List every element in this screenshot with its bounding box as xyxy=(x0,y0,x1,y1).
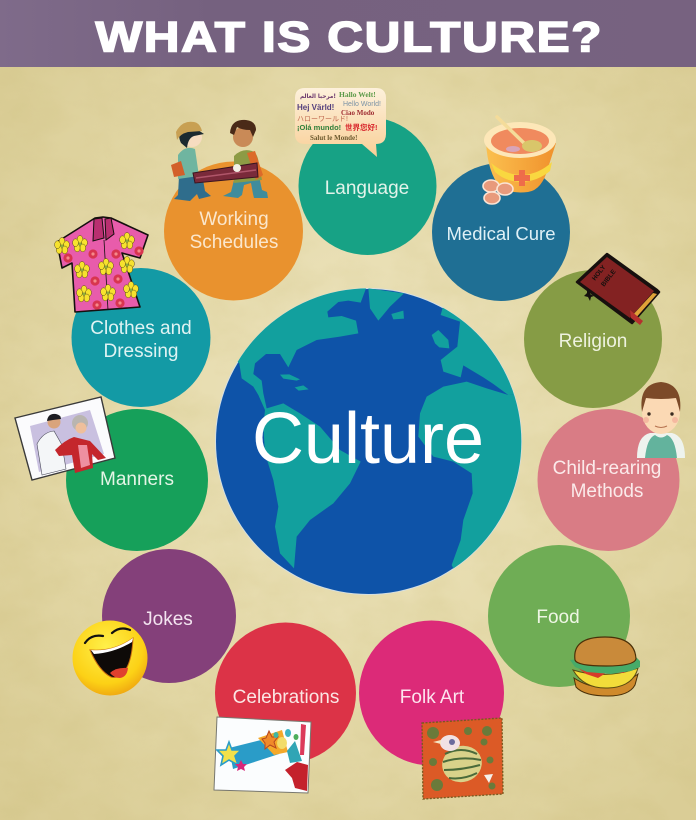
icon: child portrait xyxy=(637,382,685,458)
panel: Clothes and Dressing xyxy=(55,217,210,407)
panel: Medical Cure xyxy=(432,117,570,301)
panel: Working Schedules: Schedules xyxy=(190,232,278,253)
icon: holy bible xyxy=(577,254,659,325)
panel: Clothes and Dressing: Dressing xyxy=(104,341,178,362)
icon: speech bubble of greetings xyxy=(295,88,386,157)
panel: Language: Language xyxy=(325,178,409,199)
world map continents xyxy=(238,288,522,568)
icon: speech bubble of greetings: ハローワールド! xyxy=(297,115,348,123)
panel: Language xyxy=(295,88,436,255)
panel: Food: Food xyxy=(536,607,580,628)
icon: folk painting of a bird xyxy=(422,718,503,799)
panel: Folk Art: Folk Art xyxy=(400,687,465,708)
icon: laughing smiley xyxy=(72,620,148,696)
panel: Jokes xyxy=(72,549,236,696)
icon: speech bubble of greetings: مرحبا العالم! xyxy=(300,93,336,100)
panel: Manners xyxy=(15,397,208,551)
icon: holy bible: BIBLE xyxy=(600,268,618,288)
panel: Celebrations xyxy=(214,622,356,793)
panel: Celebrations: Celebrations xyxy=(233,687,339,708)
panel: Working Schedules: Working xyxy=(199,209,269,230)
panel: Religion xyxy=(524,254,662,408)
icon: floral shirt xyxy=(55,217,148,312)
panel: Religion: Religion xyxy=(559,331,627,352)
icon: speech bubble of greetings: Ciao Modo xyxy=(341,109,375,117)
icon: hamburger xyxy=(570,637,640,696)
icon: mortar with pills xyxy=(483,117,556,204)
panel: Food xyxy=(488,545,640,696)
icon: speech bubble of greetings: 世界您好! xyxy=(345,122,378,132)
icon: speech bubble of greetings: Hello World! xyxy=(343,101,381,108)
icon: two workers carrying a table xyxy=(171,120,268,201)
panel: Working Schedules xyxy=(164,120,303,300)
panel: Child-rearing Methods xyxy=(538,382,685,551)
icon: speech bubble of greetings: Hej Värld! xyxy=(297,103,334,112)
center label: Culture: Culture xyxy=(252,399,484,479)
globe xyxy=(215,280,533,597)
title: WHAT IS CULTURE? xyxy=(96,13,602,61)
icon: speech bubble of greetings: Salut le Monde! xyxy=(310,134,357,142)
panel: Folk Art xyxy=(359,620,504,799)
panel: Jokes: Jokes xyxy=(143,609,193,630)
panel: Child-rearing Methods: Child-rearing xyxy=(553,458,661,479)
icon: holy bible: HOLY xyxy=(591,264,608,282)
title banner xyxy=(0,0,696,67)
icon: party greeting card xyxy=(214,717,311,793)
icon: helper and elderly woman picture xyxy=(15,397,115,480)
panel: Manners: Manners xyxy=(100,469,174,490)
panel: Clothes and Dressing: Clothes and xyxy=(90,318,192,339)
icon: speech bubble of greetings: ¡Olá mundo! xyxy=(297,123,341,132)
panel: Medical Cure: Medical Cure xyxy=(446,223,556,244)
panel: Child-rearing Methods: Methods xyxy=(571,481,643,502)
icon: speech bubble of greetings: Hallo Welt! xyxy=(339,90,376,99)
